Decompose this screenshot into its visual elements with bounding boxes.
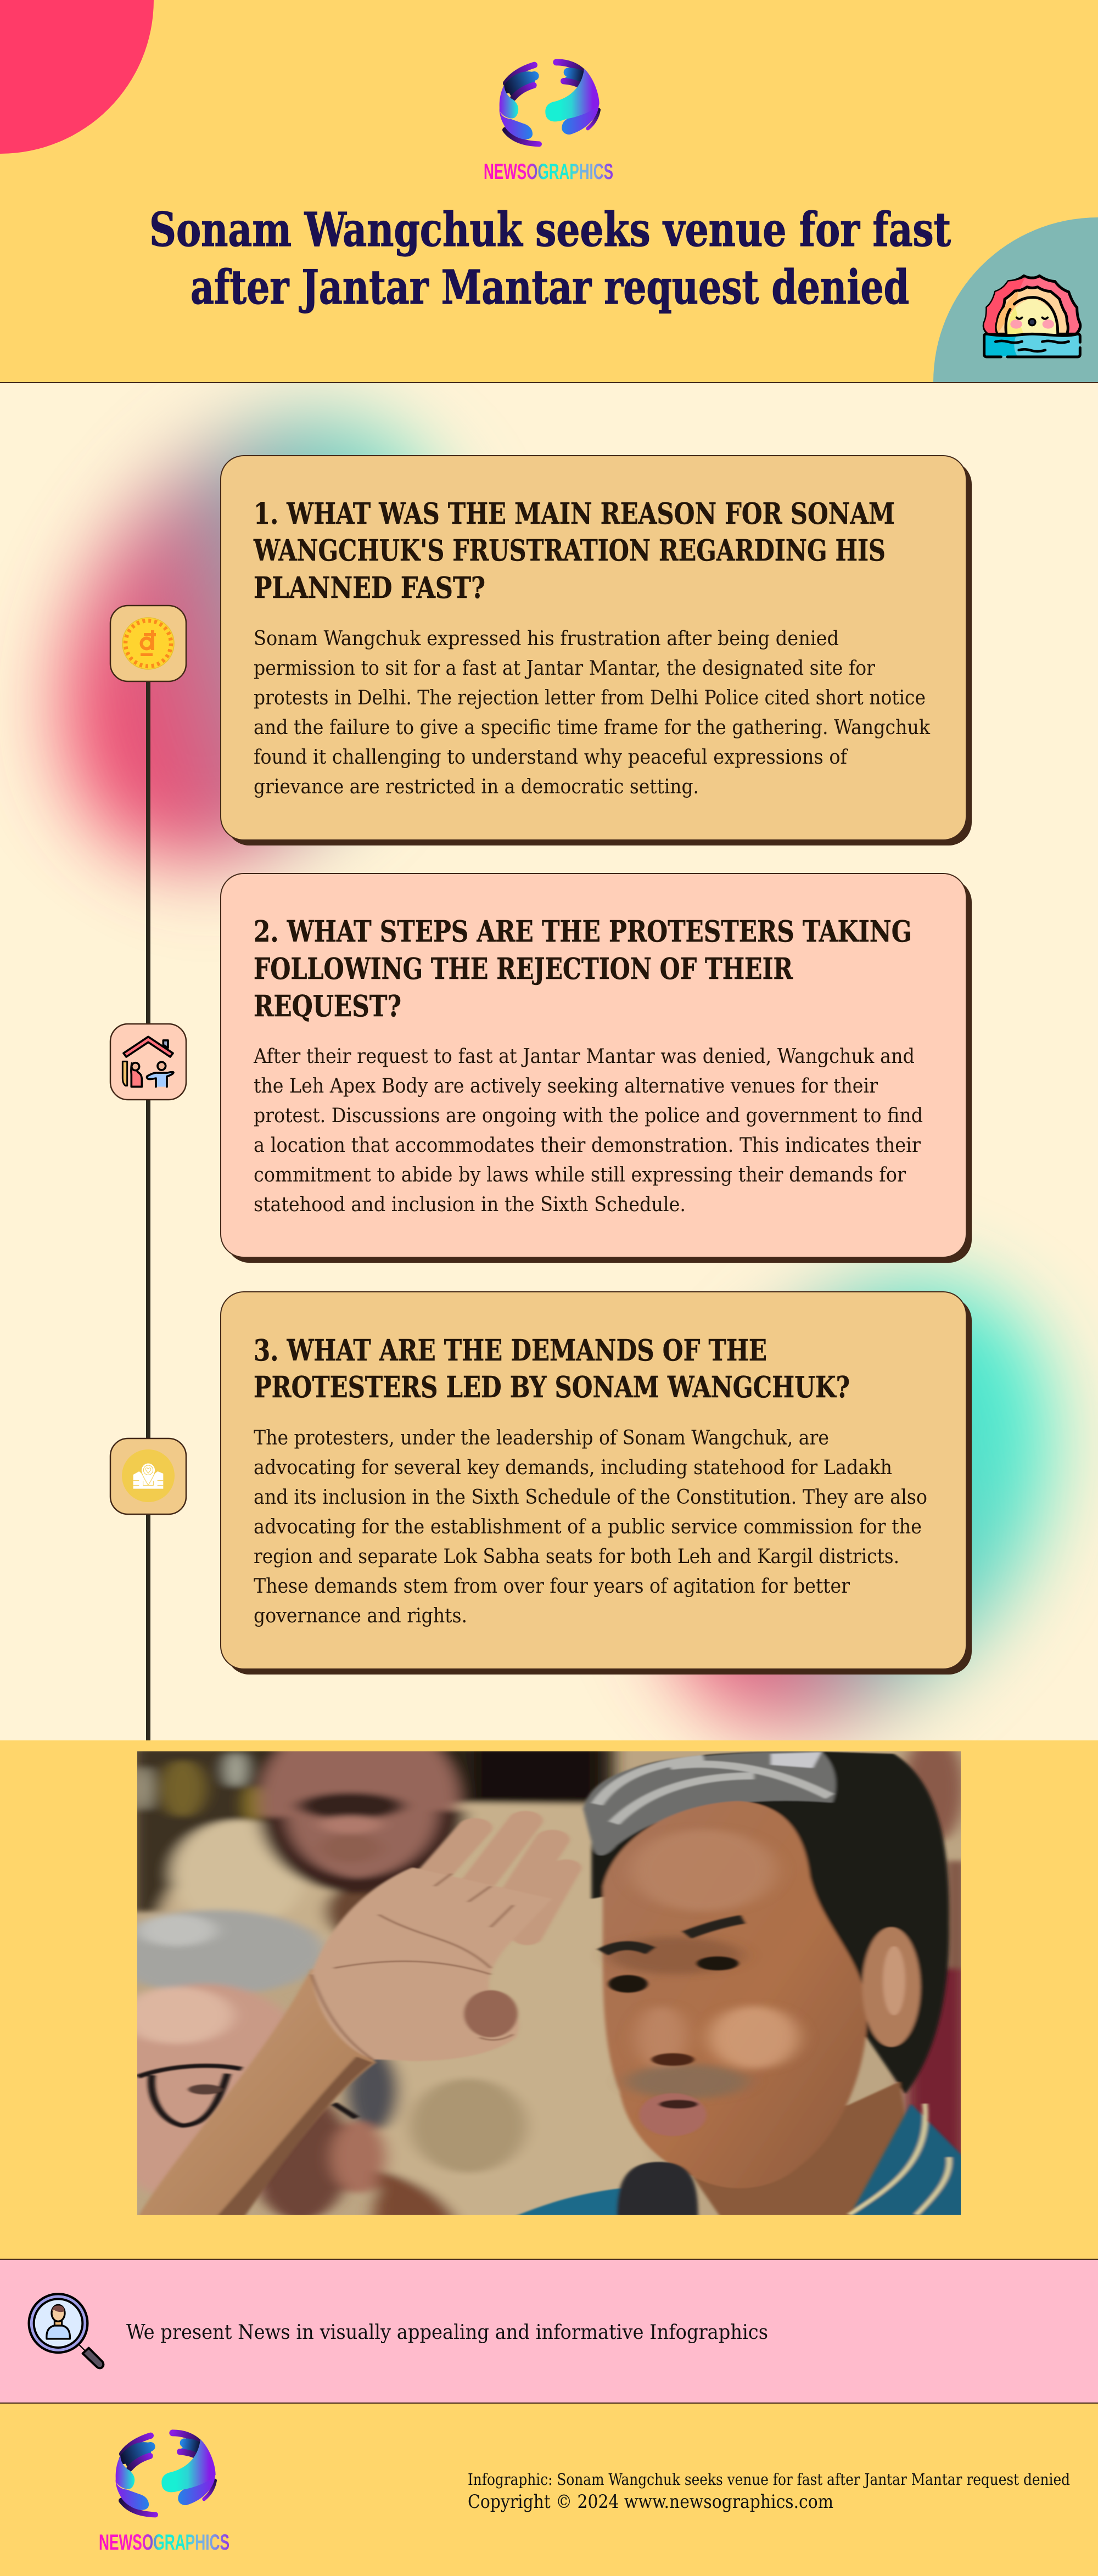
body text 2: the Leh Apex Body are actively seeking alternative venues for their xyxy=(254,1075,878,1097)
heading 1 xyxy=(253,497,895,605)
logo: footer: NEWSOGRAPHICS xyxy=(99,2530,229,2555)
body text 2: a location that accommodates their demonstration. This indicates their xyxy=(254,1134,921,1157)
heading 2 xyxy=(254,915,912,1023)
footer credits xyxy=(468,2470,1070,2513)
body text 1: permission to sit for a fast at Jantar Mantar, the designated site for xyxy=(254,657,876,680)
icon: map pin on city xyxy=(110,1438,186,1514)
body text 1: Sonam Wangchuk expressed his frustration after being denied xyxy=(254,628,839,650)
footer credits: Infographic: Sonam Wangchuk seeks venue for fast after Jantar Mantar request denied xyxy=(468,2470,1070,2489)
body text 2: protest. Discussions are ongoing with the police and government to find xyxy=(254,1105,923,1127)
body text 3: The protesters, under the leadership of Sonam Wangchuk, are xyxy=(254,1427,829,1449)
body text 3: region and separate Lok Sabha seats for both Leh and Kargil districts. xyxy=(254,1545,899,1568)
body text 3: and its inclusion in the Sixth Schedule of the Constitution. They are also xyxy=(254,1486,927,1509)
heading 3 xyxy=(254,1334,850,1404)
icon: house with people xyxy=(110,1024,186,1100)
decorative teal quarter circle xyxy=(933,217,1098,382)
body text 3: advocating for several key demands, including statehood for Ladakh xyxy=(254,1457,892,1479)
card 3 background xyxy=(221,1292,972,1675)
panel: photo section xyxy=(0,1716,1098,2260)
heading 3: PROTESTERS LED BY SONAM WANGCHUK? xyxy=(254,1370,850,1404)
timeline line xyxy=(146,659,150,1740)
decorative gradient blobs xyxy=(0,344,1098,1800)
heading 2: 2. WHAT STEPS ARE THE PROTESTERS TAKING xyxy=(254,915,912,949)
photo: Sonam Wangchuk saluting, painted xyxy=(137,1751,961,2215)
body text 2: statehood and inclusion in the Sixth Schedule. xyxy=(254,1194,686,1216)
logo: header xyxy=(484,62,613,184)
panel: question 3 xyxy=(221,1292,972,1675)
panel: header xyxy=(0,0,1098,383)
logo: header: NEWSOGRAPHICS xyxy=(484,160,613,184)
body text 1: grievance are restricted in a democratic setting. xyxy=(254,776,699,798)
footer credits: Copyright © 2024 www.newsographics.com xyxy=(468,2491,833,2513)
body text 3: advocating for the establishment of a public service commission for the xyxy=(254,1516,922,1538)
card 2 background xyxy=(221,873,972,1263)
title: after Jantar Mantar request denied xyxy=(191,260,909,315)
heading 1: 1. WHAT WAS THE MAIN REASON FOR SONAM xyxy=(254,497,895,531)
title xyxy=(149,203,951,315)
icon: magnifier with person xyxy=(29,2294,103,2368)
body text 1: protests in Delhi. The rejection letter from Delhi Police cited short notice xyxy=(254,687,926,709)
body text 1: found it challenging to understand why peaceful expressions of xyxy=(254,746,848,769)
card 1 background xyxy=(221,456,972,845)
decorative pink quarter circle xyxy=(0,0,154,154)
heading 1: WANGCHUK'S FRUSTRATION REGARDING HIS xyxy=(253,534,886,568)
heading 2: REQUEST? xyxy=(254,989,401,1023)
panel: question 2 xyxy=(221,873,972,1263)
tagline text: We present News in visually appealing and informative Infographics xyxy=(126,2321,768,2344)
body text 1 xyxy=(254,628,930,798)
body text 2: commitment to abide by laws while still expressing their demands for xyxy=(254,1164,906,1186)
body text 3 xyxy=(254,1427,927,1627)
title: Sonam Wangchuk seeks venue for fast xyxy=(149,203,951,257)
body text 1: and the failure to give a specific time frame for the gathering. Wangchuk xyxy=(254,716,930,739)
panel: footer xyxy=(0,2404,1098,2576)
heading 3: 3. WHAT ARE THE DEMANDS OF THE xyxy=(254,1334,767,1368)
heading 1: PLANNED FAST? xyxy=(254,571,485,605)
icon: rupee coin xyxy=(110,606,186,681)
body text 2 xyxy=(253,1045,923,1216)
icon: smiling sun over water xyxy=(984,276,1080,357)
body text 3: governance and rights. xyxy=(254,1605,467,1627)
logo: footer xyxy=(99,2433,229,2555)
panel: question 1 xyxy=(221,456,972,845)
heading 2: FOLLOWING THE REJECTION OF THEIR xyxy=(254,952,793,986)
body text 2: After their request to fast at Jantar Mantar was denied, Wangchuk and xyxy=(253,1045,915,1068)
panel: tagline band xyxy=(0,2259,1098,2404)
body text 3: These demands stem from over four years of agitation for better xyxy=(254,1575,850,1598)
